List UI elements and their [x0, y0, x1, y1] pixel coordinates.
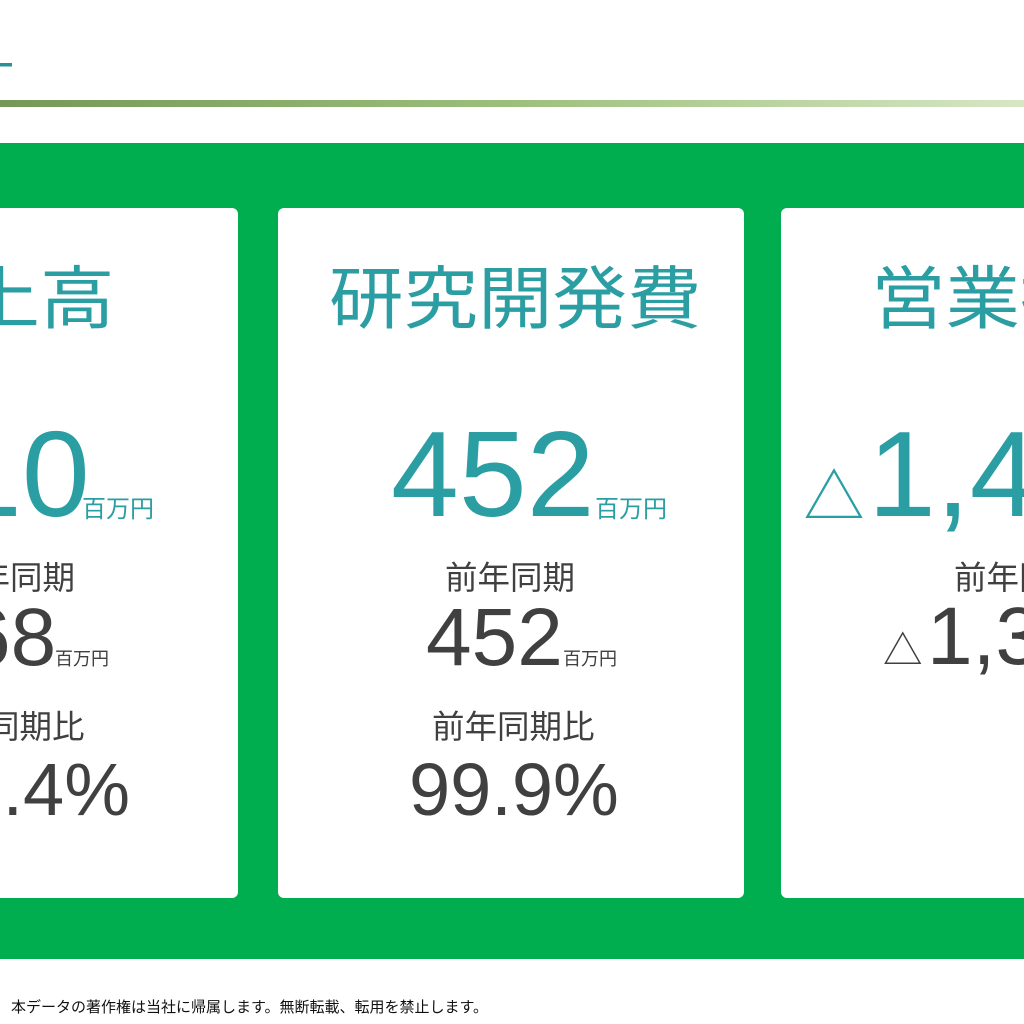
- card background: [781, 208, 1024, 898]
- current value: 452: [391, 406, 595, 542]
- prior-year unit: 百万円: [55, 645, 109, 671]
- year-on-year value: .4%: [2, 748, 130, 831]
- title fragment: [0, 63, 12, 66]
- title gradient rule: [0, 100, 1024, 107]
- year-on-year label: 前年同期比: [432, 701, 595, 748]
- prior-year label: 前年同期: [445, 552, 575, 599]
- year-on-year value: 99.9%: [409, 748, 619, 831]
- current value negative mark: △: [804, 448, 865, 536]
- current value unit: 百万円: [82, 489, 154, 524]
- prior-year unit: 百万円: [563, 645, 617, 671]
- prior-year value: 452: [426, 592, 563, 683]
- green background band: [0, 143, 1024, 959]
- heading: R&D expenses: 研究開発費: [329, 244, 701, 343]
- panel: R&D expenses: [278, 208, 744, 898]
- prior-year negative mark: △: [883, 620, 922, 676]
- card background: [278, 208, 744, 898]
- copyright notice: 本データの著作権は当社に帰属します。無断転載、転用を禁止します。: [11, 996, 488, 1017]
- panel: operating loss: [781, 208, 1024, 898]
- current value unit: 百万円: [595, 489, 667, 524]
- card background: [0, 208, 238, 898]
- panel: net sales: [0, 208, 238, 898]
